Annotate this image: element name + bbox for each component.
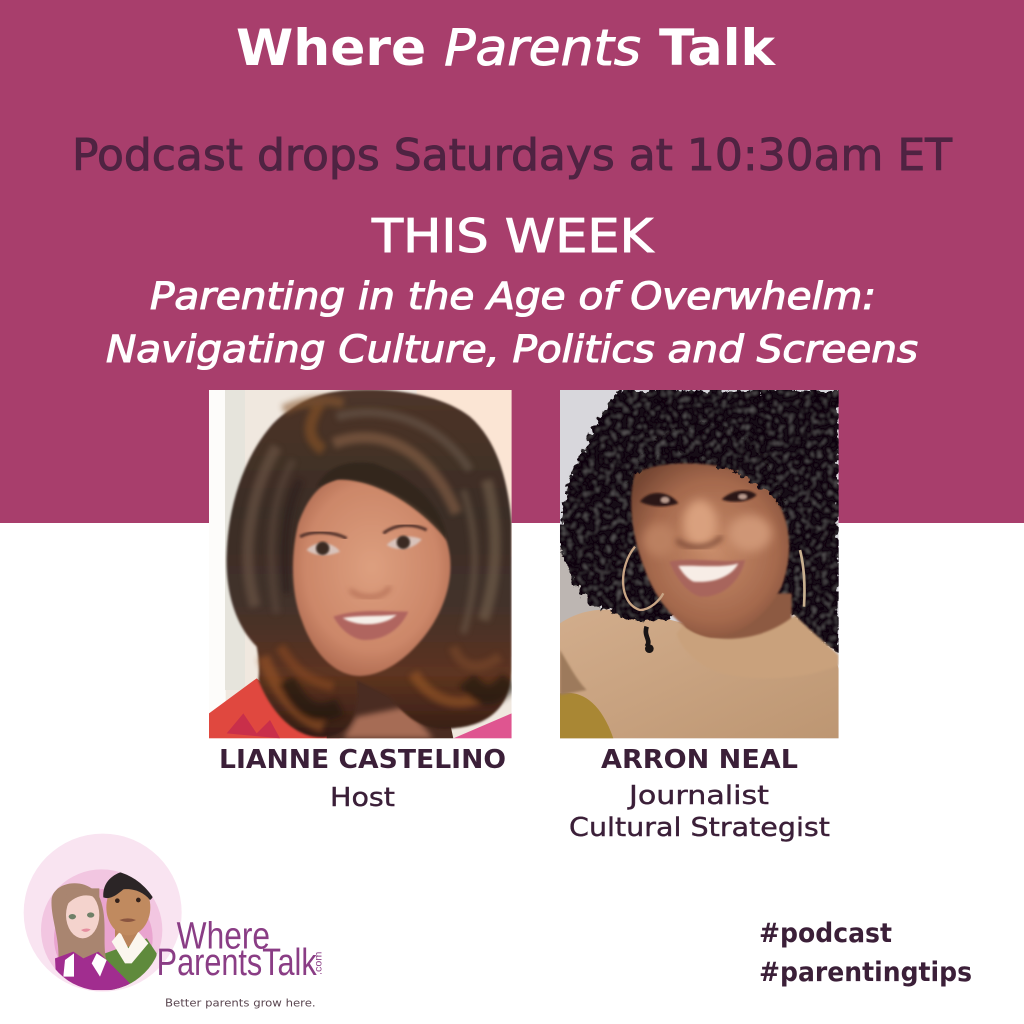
- neck: [683, 593, 792, 641]
- highlights: [683, 500, 717, 547]
- fringe: [628, 423, 785, 510]
- neck: [326, 679, 454, 738]
- hashtags: #podcast: [759, 918, 892, 949]
- guest roles: Cultural Strategist: [569, 813, 830, 843]
- face: [293, 478, 450, 676]
- episode title: Parenting in the Age of Overwhelm:: [150, 275, 876, 318]
- collar: [680, 614, 839, 666]
- curl: [646, 627, 648, 647]
- logo tagline: Better parents grow here.: [165, 996, 316, 1009]
- smile: [333, 611, 408, 640]
- episode title: [106, 275, 918, 371]
- guest name: ARRON NEAL: [601, 745, 798, 775]
- hashtags: [759, 918, 972, 988]
- face: [631, 463, 789, 637]
- photo: Arron Neal: [560, 390, 839, 738]
- man: [105, 938, 157, 990]
- sweater: [560, 610, 839, 738]
- photo: Lianne Castelino: [209, 390, 512, 738]
- hoop earrings: [623, 547, 663, 610]
- hair: [560, 390, 839, 652]
- eyes: [300, 532, 347, 538]
- guest roles: Journalist: [627, 781, 769, 811]
- logo wordmark: .com: [313, 952, 324, 975]
- host name: LIANNE CASTELINO: [219, 745, 506, 775]
- logo: Where Parents Talk: [24, 834, 324, 1009]
- logo wordmark: Where: [177, 914, 270, 957]
- woman: [51, 883, 107, 962]
- host role: Host: [330, 783, 395, 813]
- logo wordmark: ParentsTalk: [157, 941, 317, 984]
- nose: [350, 587, 390, 597]
- eyes: [640, 493, 678, 506]
- episode title: Navigating Culture, Politics and Screens: [106, 328, 918, 371]
- smile: [669, 560, 745, 597]
- logo wordmark: [157, 914, 324, 984]
- title: Where Parents Talk: [236, 19, 777, 77]
- hair: [227, 390, 512, 737]
- schedule line: Podcast drops Saturdays at 10:30am ET: [72, 130, 952, 181]
- hashtags: #parentingtips: [759, 957, 972, 988]
- red top: [209, 678, 340, 738]
- background panel: plum header: [0, 0, 1024, 523]
- guest roles: [569, 781, 830, 843]
- this week heading: THIS WEEK: [371, 209, 655, 263]
